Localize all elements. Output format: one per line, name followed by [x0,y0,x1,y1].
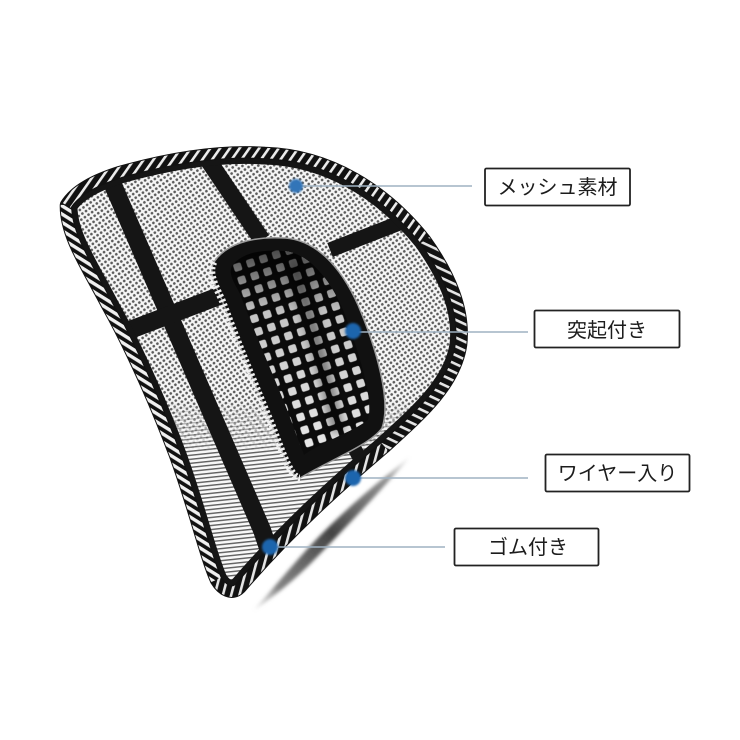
leader line [270,546,445,548]
pad frame [212,238,385,478]
leader line [352,331,528,333]
mesh panel [78,164,450,580]
callout: raised nubs [345,310,680,348]
leader line [296,185,472,187]
label box [534,310,680,348]
leader line [354,477,528,479]
raised massage pad [212,238,385,478]
pad central groove [293,262,338,432]
callout: wire inside [345,454,690,492]
mesh lumbar cushion [50,140,480,610]
label box [485,168,630,206]
pad upper shading [231,251,369,455]
marker dot [289,179,303,193]
rope edge binding [66,152,462,592]
pad rope edge [212,262,300,478]
callout: mesh material [289,168,630,206]
infographic: lumbar cushion feature diagram [60,146,690,607]
marker dot [345,323,361,339]
cushion drop shadow [254,457,410,610]
label text: メッシュ素材 [498,176,618,199]
label box [454,528,598,566]
label box [546,454,690,492]
black support straps [66,152,462,592]
pad grid of raised nubs [231,251,369,455]
label text: ゴム付き [488,536,568,559]
callout: elastic band [262,528,598,566]
label text: ワイヤー入り [558,463,677,485]
marker dot [262,539,278,555]
marker dot [345,470,361,486]
label text: 突起付き [567,319,647,342]
